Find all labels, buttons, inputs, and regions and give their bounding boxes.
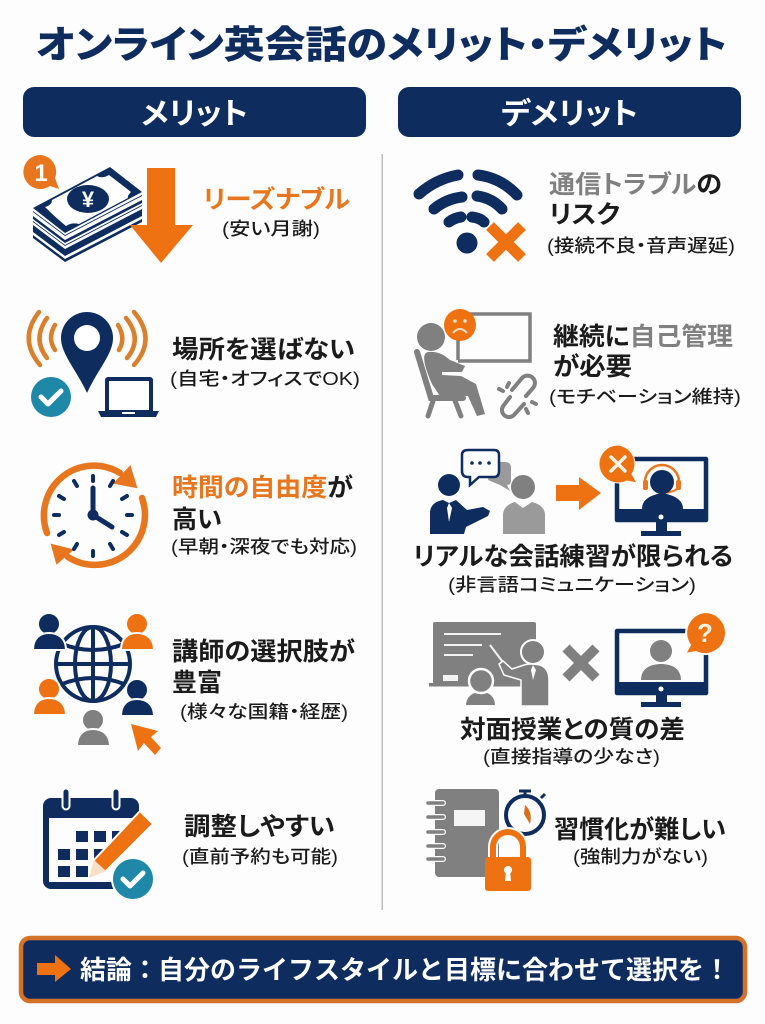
- merit 4 text: [172, 637, 355, 722]
- demerit 1 text: 通信トラブルの: [549, 170, 722, 199]
- merit 4 text: 講師の選択肢が: [172, 637, 355, 666]
- icon: classroom versus online: [429, 612, 726, 707]
- demerit 1 text: リスク: [549, 201, 620, 229]
- demerit 3 text: リアルな会話練習が限られる: [413, 542, 733, 571]
- demerit 4 text: 対面授業との質の差: [460, 716, 685, 744]
- panel: demerits: [413, 170, 741, 891]
- demerit 4 text: (直接指導の少なさ): [483, 747, 660, 767]
- merit 5 text: (直前予約も可能): [182, 847, 338, 867]
- demerit 3 text: [413, 542, 733, 595]
- panel: merits: [23, 155, 360, 900]
- header: merit: [23, 87, 366, 137]
- merit 1 text: (安い月謝): [222, 219, 320, 239]
- conclusion text: 結論：自分のライフスタイルと目標に合わせて選択を！: [80, 955, 730, 985]
- icon: money with falling arrow: 1: [34, 160, 48, 187]
- demerit 5 text: (強制力がない): [573, 846, 708, 867]
- merit 5 text: [182, 813, 338, 867]
- icon: conclusion arrow: [37, 955, 71, 982]
- icon: notebook, stopwatch and lock: [428, 789, 545, 891]
- merit 4 text: (様々な国籍・経歴): [180, 702, 348, 722]
- icon: conversation to online monitor: [430, 445, 708, 536]
- demerit 1 text: [547, 170, 735, 256]
- title: オンライン英会話のメリット・デメリット: [36, 24, 727, 67]
- merit 3 text: 時間の自由度が: [172, 473, 353, 502]
- demerit 1 text: (接続不良・音声遅延): [547, 236, 735, 256]
- merit 1 text: [203, 185, 350, 239]
- header: merit: メリット: [141, 98, 248, 131]
- demerit 4 text: [460, 716, 685, 767]
- merit 2 text: 場所を選ばない: [172, 336, 355, 364]
- header: demerit: [398, 87, 741, 137]
- merit 3 text: (早朝・深夜でも対応): [171, 537, 357, 557]
- demerit 5 text: 習慣化が難しい: [554, 815, 726, 844]
- merit 3 text: 高い: [172, 506, 222, 534]
- demerit 2 text: が必要: [553, 352, 632, 381]
- demerit 3 text: (非言語コミュニケーション): [448, 575, 696, 595]
- demerit 5 text: [554, 815, 726, 867]
- icon: globe with teachers: [33, 613, 161, 755]
- conclusion banner: [21, 938, 745, 1001]
- icon: broken wifi: [419, 175, 522, 258]
- icon: money with falling arrow: [23, 155, 193, 263]
- icon: location pin with signal waves: [29, 312, 159, 417]
- merit 3 text: [171, 473, 357, 557]
- icon: money with falling arrow: ¥: [82, 187, 95, 212]
- icon: person at monitor with broken chain: [417, 309, 536, 417]
- merit 4 text: 豊富: [172, 669, 222, 697]
- icon: classroom versus online: ?: [697, 618, 713, 648]
- merit 2 text: [170, 336, 360, 389]
- demerit 2 text: 継続に自己管理: [553, 323, 733, 351]
- icon: clock with circular arrows: [44, 466, 145, 565]
- demerit 2 text: (モチベーション維持): [549, 387, 741, 407]
- icon: calendar with pencil: [43, 792, 154, 900]
- merit 1 text: リーズナブル: [203, 185, 350, 214]
- merit 5 text: 調整しやすい: [184, 813, 335, 841]
- demerit 2 text: [549, 323, 741, 407]
- header: demerit: デメリット: [501, 97, 638, 131]
- merit 2 text: (自宅・オフィスでOK): [170, 369, 360, 389]
